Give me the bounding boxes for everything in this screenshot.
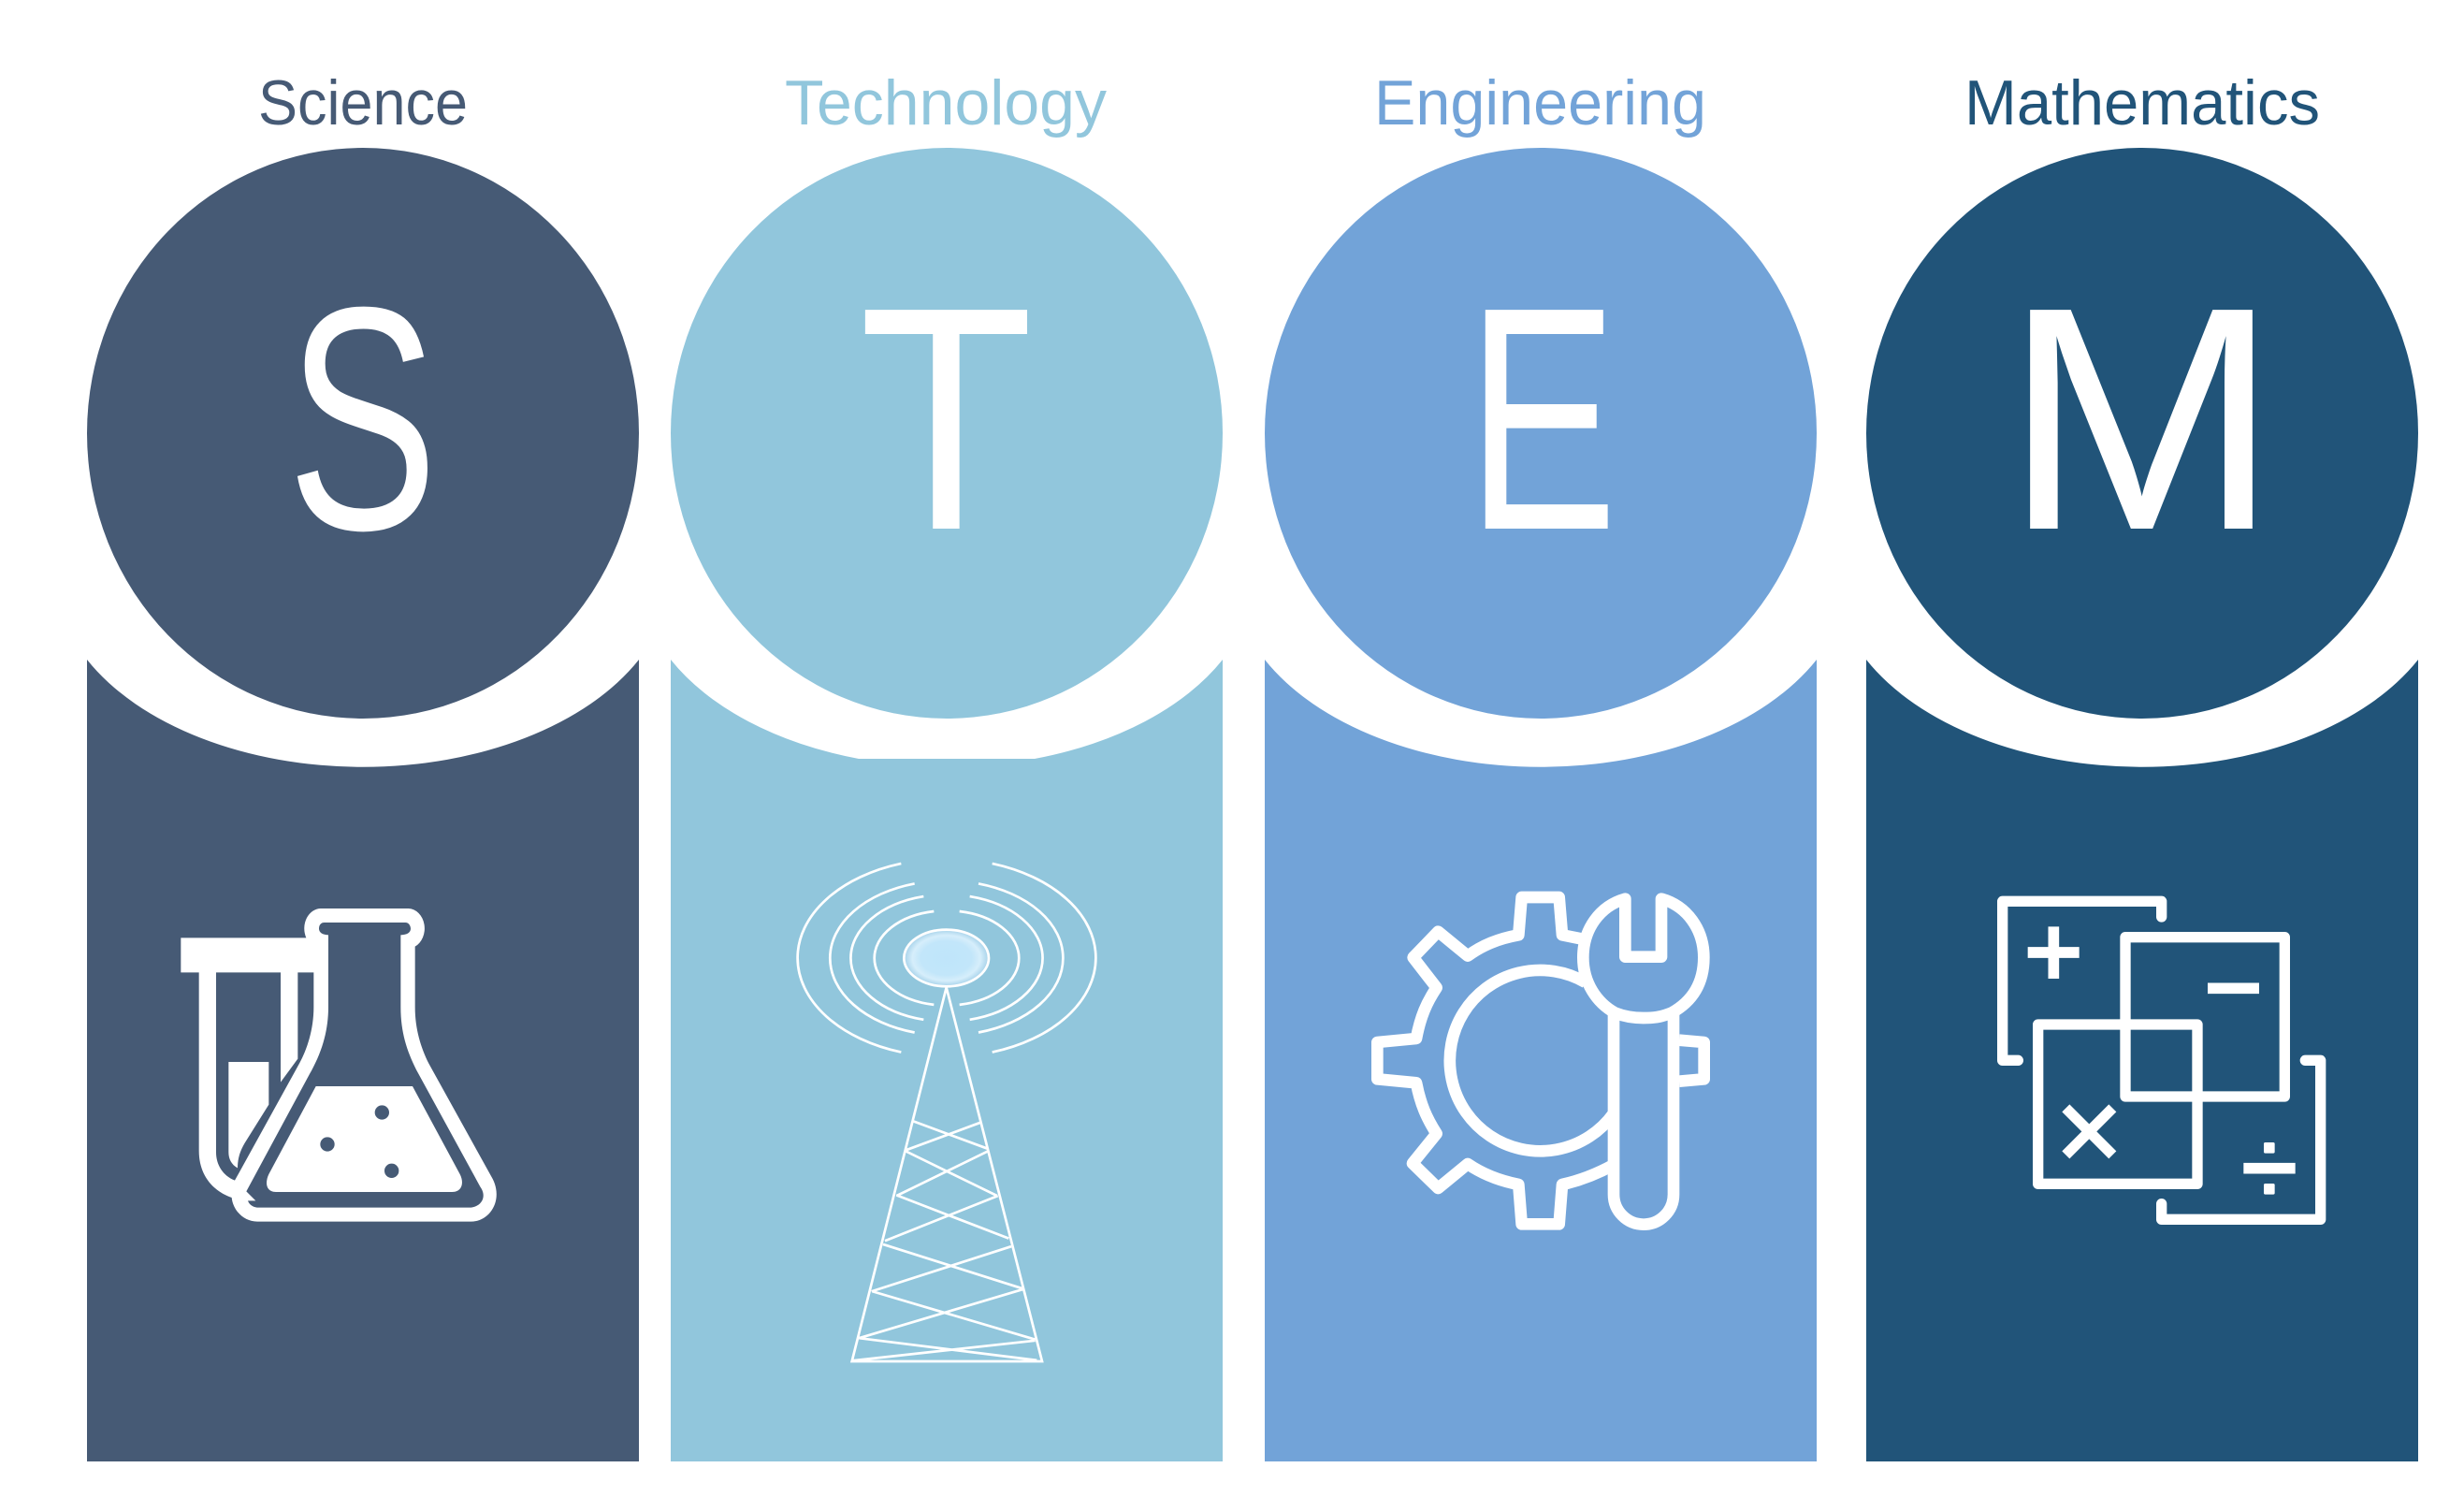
- letter T: T: [859, 241, 1034, 597]
- circle: Science: [87, 148, 639, 719]
- circle: Mathematics: [1866, 148, 2418, 719]
- circle: Engineering: [1265, 148, 1817, 719]
- column: Engineering: [1265, 67, 1817, 1461]
- letter E: E: [1467, 241, 1617, 597]
- icon: gear and wrench: [1377, 897, 1704, 1225]
- heading: Mathematics: Mathematics: [1964, 67, 2320, 138]
- icon: test tube and flask: [181, 908, 497, 1222]
- circle: Technology: [671, 148, 1223, 719]
- panel: Technology: [671, 660, 1223, 1461]
- heading: Technology: Technology: [785, 67, 1107, 138]
- panel: Science: [87, 660, 639, 1461]
- heading: Engineering: Engineering: [1374, 67, 1706, 138]
- icon: arithmetic operators: [2003, 901, 2321, 1219]
- icon: radio tower: [798, 864, 1095, 1361]
- panel: Engineering: [1265, 660, 1817, 1461]
- heading: Science: Science: [258, 67, 468, 138]
- column: Mathematics: [1866, 67, 2418, 1461]
- column: Science: [87, 67, 639, 1461]
- letter S: S: [287, 241, 438, 597]
- panel: Mathematics: [1866, 660, 2418, 1461]
- letter M: M: [2003, 241, 2280, 597]
- column: Technology: [671, 67, 1223, 1461]
